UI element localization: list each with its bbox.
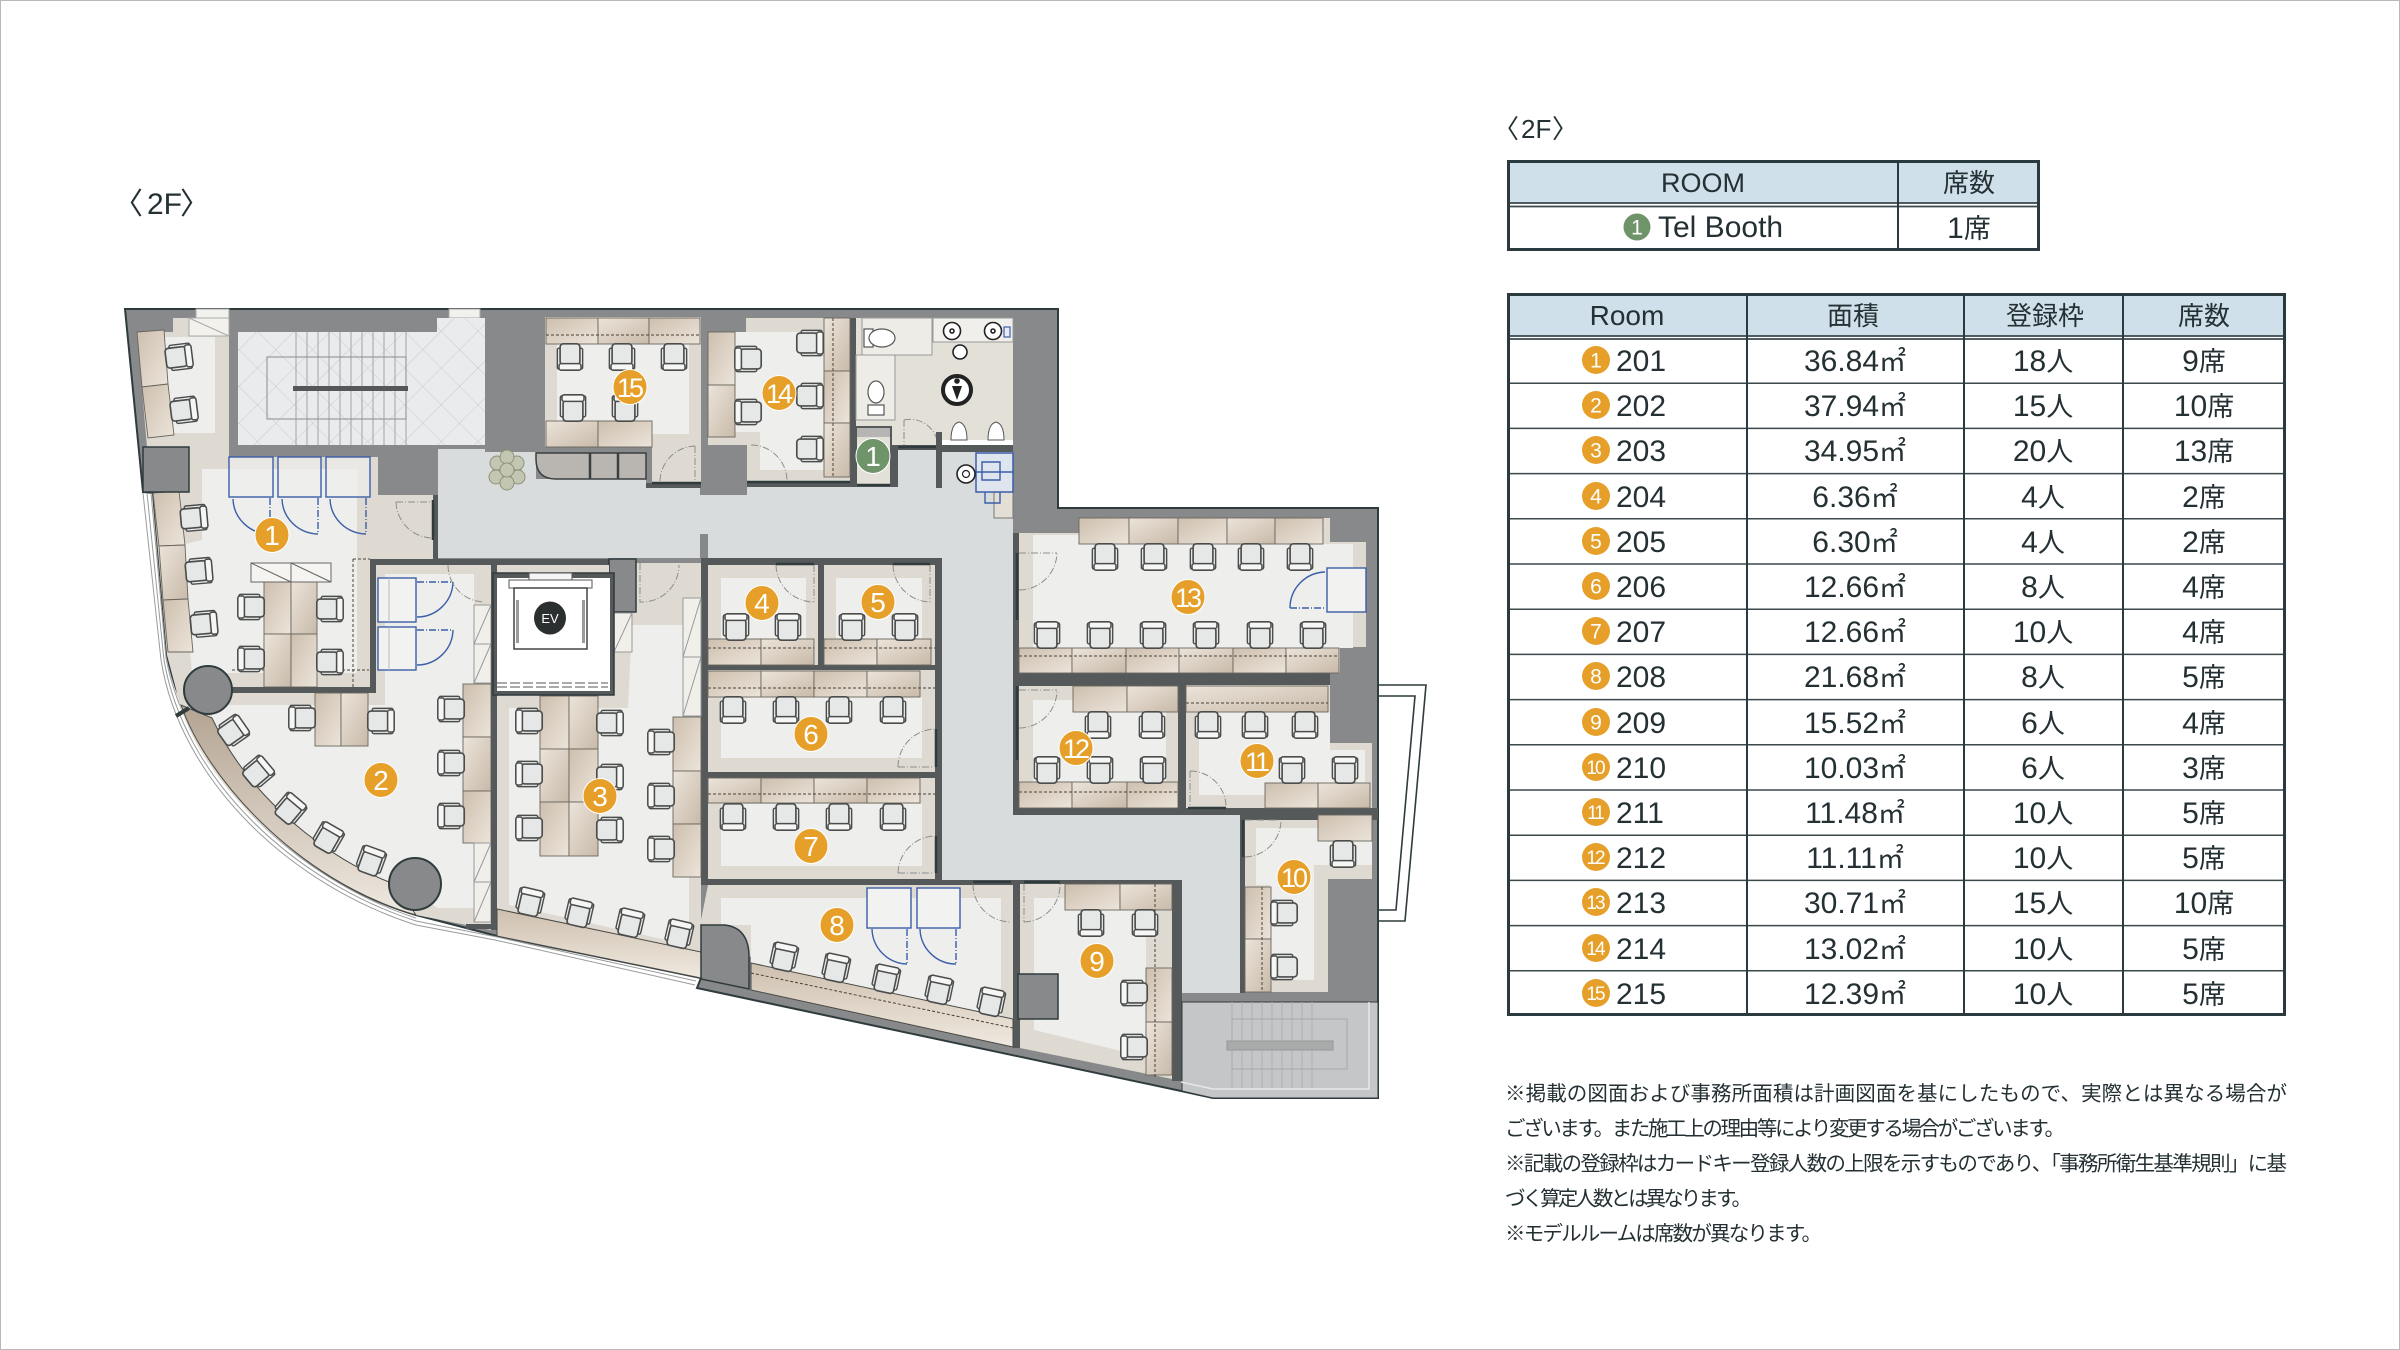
marker 14: 14 [766,379,793,409]
header row: 登録枠 [2006,301,2084,331]
marker 7 [794,828,828,864]
table: tel booth: ROOM [1661,168,1745,198]
row 207 [1582,616,2226,649]
row 213: 13 [1586,893,1605,914]
row 212: 5席 [2182,842,2226,875]
row 203: 20人 [2013,435,2073,468]
row 213: 15人 [2013,887,2073,920]
room 209 [1018,882,1172,1079]
row 211: 5席 [2182,797,2226,830]
marker 1: 1 [264,520,280,551]
row 208 [1582,661,2226,694]
marker 3: 3 [592,781,608,812]
row 212: 10人 [2013,842,2073,875]
corridor [438,449,1240,993]
room 207 [708,778,936,879]
footnotes: ※モデルルームは席数が異なります。 [1505,1222,1822,1246]
marker 3 [583,778,617,814]
marker 15: 15 [617,373,643,403]
restroom [856,318,1013,447]
row 209: 6人 [2021,707,2065,740]
heading: table 2F: 〉 [1552,114,1578,144]
row 211: 211 [1616,797,1664,830]
row 211 [1582,797,2226,830]
stairwell north [238,318,485,445]
room 208 [700,882,1013,1047]
table: tel booth: 1席 [1947,212,1991,245]
glass curtain lines [143,493,696,985]
heading: floor plan 2F: 2F [147,188,182,221]
row 201: 9席 [2182,345,2226,378]
tel booth row: 1 [1631,216,1643,240]
row 215 [1582,978,2226,1011]
row 215: 12.39㎡ [1804,978,1906,1011]
pillars [176,666,441,910]
marker 5 [861,584,895,620]
footnotes [1505,1082,2287,1246]
service area [936,432,1013,518]
row 203: 203 [1616,435,1666,468]
row 204: 4人 [2021,481,2065,514]
floor plan [125,309,1426,1098]
elevator [493,565,614,695]
row 202: 15人 [2013,390,2073,423]
heading: floor plan 2F: 〉 [180,188,210,221]
room 204 [708,564,818,665]
row 202: 37.94㎡ [1804,390,1906,423]
room 214 [708,318,850,482]
room 202 [176,559,497,930]
windows [196,309,480,318]
row 206 [1582,571,2226,604]
row 203: 3 [1590,440,1602,462]
header row: Room [1590,300,1664,331]
row 214: 5席 [2182,933,2226,966]
row 207: 4席 [2182,616,2226,649]
row 202: 202 [1616,390,1666,423]
row 204: 204 [1616,481,1666,514]
row 207: 10人 [2013,616,2073,649]
row 202: 2 [1590,394,1602,418]
marker 9: 9 [1089,946,1105,977]
row 210: 10.03㎡ [1804,752,1906,785]
footnotes: ※掲載の図面および事務所面積は計画図面を基にしたもので、実際とは異なる場合が [1505,1082,2287,1106]
building walls [125,309,1378,1098]
row 208: 208 [1616,661,1666,694]
row 215: 10人 [2013,978,2073,1011]
room 212 [1017,686,1178,808]
marker 2 [364,762,398,798]
header row: 席数 [2178,301,2230,331]
footnotes: ※記載の登録枠はカードキー登録人数の上限を示すものであり、「事務所衛生基準規則」に基 [1505,1152,2287,1176]
room 210 [1243,815,1372,992]
row 205 [1582,526,2226,559]
row 206: 12.66㎡ [1804,571,1906,604]
row 209: 9 [1590,712,1602,734]
row 211: 11 [1587,803,1604,824]
footnotes: ございます。また施工上の理由等により変更する場合がございます。 [1505,1116,2065,1140]
plant [489,450,525,490]
marker 12 [1059,730,1093,766]
row 202 [1582,390,2234,423]
row 201: 36.84㎡ [1804,345,1906,378]
row 210: 3席 [2182,752,2226,785]
icon: restroom sign [943,376,971,404]
numbered room markers [255,370,1311,978]
row 212: 11.11㎡ [1806,842,1904,875]
row 204 [1582,481,2226,514]
row 213: 10席 [2174,887,2234,920]
marker 11: 11 [1245,747,1269,777]
row 214: 14 [1586,939,1606,960]
row 204: 4 [1590,486,1602,508]
row 215: 215 [1616,978,1666,1011]
header row [1590,300,2230,331]
row 209: 209 [1616,707,1666,740]
row 203: 13席 [2174,435,2234,468]
row 205: 5 [1590,530,1602,554]
row 208: 8 [1590,666,1602,688]
row 204: 2席 [2182,481,2226,514]
marker tel booth [856,438,890,474]
room 215 [545,317,701,483]
marker 15 [613,370,647,404]
row 211: 10人 [2013,797,2073,830]
marker 5: 5 [870,587,886,618]
row 201: 1 [1590,350,1602,372]
tel booth [855,426,892,487]
row 207: 7 [1590,620,1602,644]
row 210: 6人 [2021,752,2065,785]
row 206: 206 [1616,571,1666,604]
marker 2: 2 [373,765,389,796]
row 201 [1582,345,2226,378]
marker 4: 4 [754,588,770,619]
room 213 [1017,518,1366,673]
heading: floor plan 2F: 〈 [113,188,143,221]
room 211 [1186,685,1372,808]
marker 13: 13 [1175,583,1201,613]
marker 7: 7 [803,831,819,862]
row 201: 201 [1616,345,1666,378]
marker 8: 8 [829,910,845,941]
row 206: 4席 [2182,571,2226,604]
row 203 [1582,435,2234,468]
header row: 面積 [1827,301,1879,331]
row 209 [1582,707,2226,740]
row 204: 6.36㎡ [1812,481,1898,514]
tel booth row: Tel Booth [1658,211,1783,244]
table: tel booth: 席数 [1943,168,1995,198]
marker 6 [794,716,828,752]
row 213: 30.71㎡ [1804,887,1906,920]
row 212: 12 [1586,848,1605,869]
row 214: 13.02㎡ [1804,933,1906,966]
row 209: 4席 [2182,707,2226,740]
marker 9 [1080,944,1114,978]
marker 11 [1240,744,1274,778]
row 208: 8人 [2021,661,2065,694]
row 213 [1582,887,2234,920]
row 211: 11.48㎡ [1805,797,1905,830]
row 210: 10 [1586,758,1605,779]
marker 10 [1277,860,1311,894]
row 214: 214 [1616,933,1666,966]
row 206: 6 [1590,576,1602,598]
row 213: 213 [1616,887,1666,920]
row 212 [1582,842,2226,875]
marker 6: 6 [803,719,819,750]
marker 14 [762,376,796,410]
sinks [944,322,1002,359]
row 205: 2席 [2182,526,2226,559]
row 206: 8人 [2021,571,2065,604]
row 203: 34.95㎡ [1804,435,1906,468]
row 207: 12.66㎡ [1804,616,1906,649]
marker 13 [1171,580,1205,614]
row 202: 10席 [2174,390,2234,423]
footnotes: づく算定人数とは異なります。 [1505,1188,1752,1210]
room 206 [708,670,936,772]
row 208: 21.68㎡ [1804,661,1906,694]
balcony outline [1378,685,1426,921]
interior partitions [370,318,1378,1081]
row 212: 212 [1616,842,1666,875]
row 207: 207 [1616,616,1666,649]
table: tel booth [1508,161,2039,250]
reception counter [536,453,646,479]
heading: table 2F: 〈 [1493,114,1519,144]
table: rooms [1508,294,2285,1016]
row 215: 5席 [2182,978,2226,1011]
row 214 [1582,933,2226,966]
row 205: 4人 [2021,526,2065,559]
room 205 [824,564,935,665]
row 209: 15.52㎡ [1804,707,1906,740]
marker 4 [745,586,779,620]
room 203 [497,559,701,978]
marker 12: 12 [1063,734,1089,764]
elevator: EV [541,611,559,626]
marker 10: 10 [1281,863,1307,893]
toilets [864,329,895,415]
marker tel booth: 1 [865,441,881,472]
row 205: 6.30㎡ [1812,526,1898,559]
row 201: 18人 [2013,345,2073,378]
row 210: 210 [1616,752,1666,785]
marker 8 [820,908,854,942]
row 205: 205 [1616,526,1666,559]
row 210 [1582,752,2226,785]
urinals [951,422,1004,440]
row 208: 5席 [2182,661,2226,694]
row 214: 10人 [2013,933,2073,966]
room 201 [137,318,433,700]
stairwell south-east [1181,1002,1378,1098]
marker 1 [255,518,289,552]
heading: table 2F: 2F [1521,114,1551,144]
row 215: 15 [1586,984,1605,1005]
